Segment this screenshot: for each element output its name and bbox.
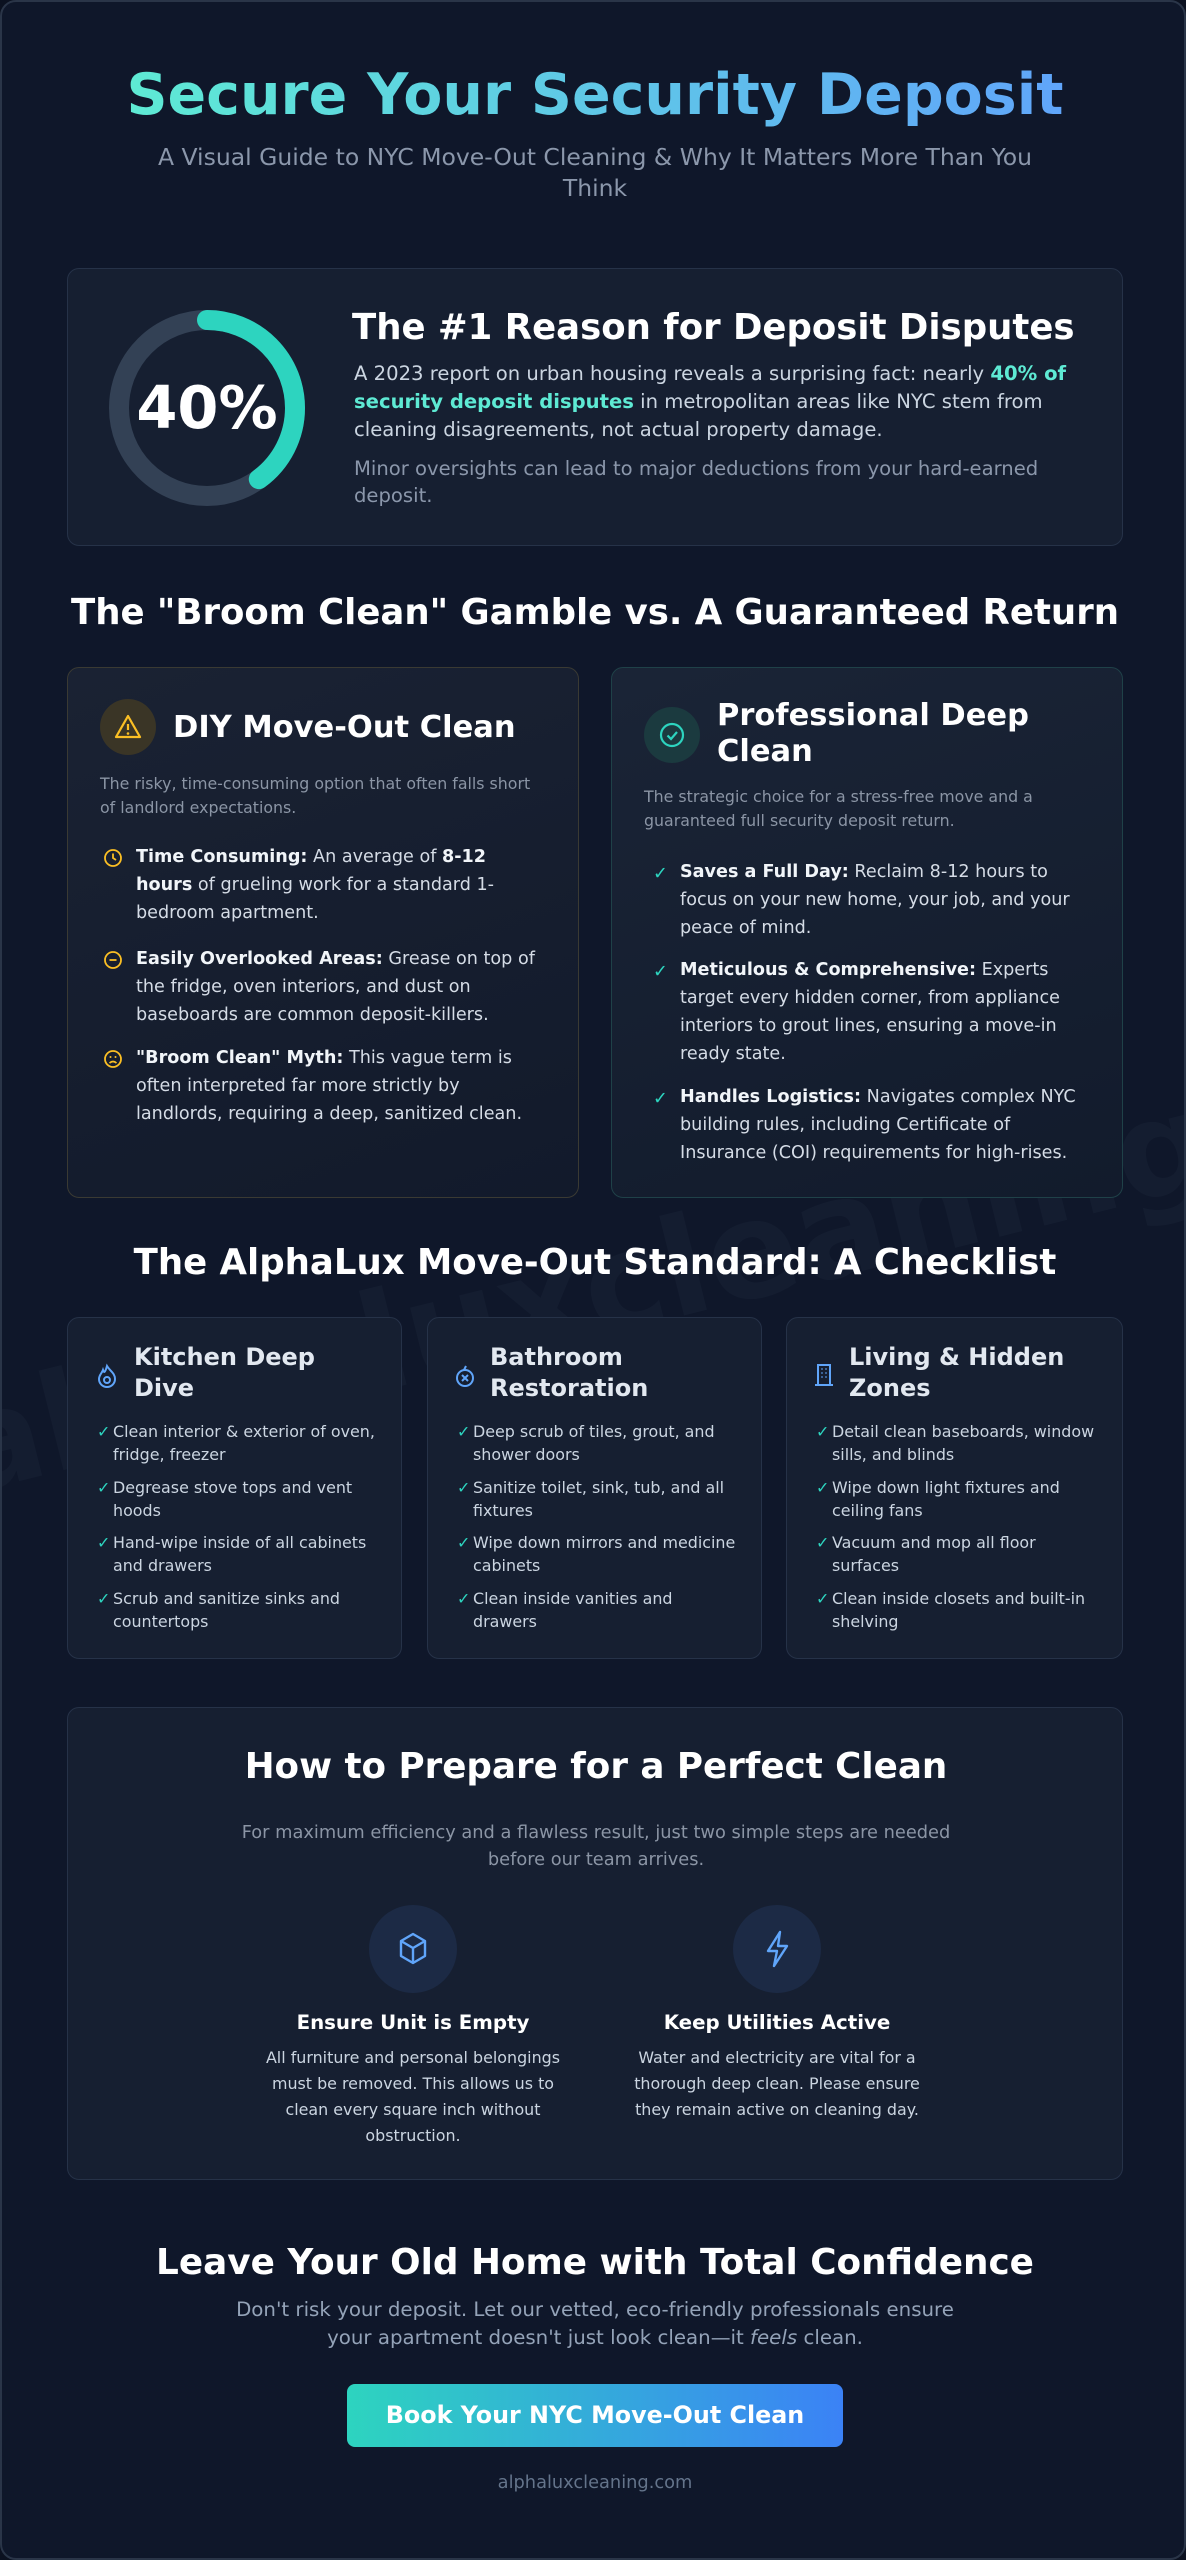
heading: comparison: The "Broom Clean" Gamble vs. A Guaranteed Return [71,592,1119,633]
icon: box [369,1905,457,1993]
text block: For maximum efficiency and a flawless result, just two simple steps are needed [242,1822,950,1843]
text block: cleaning disagreements, not actual property damage. [354,418,883,441]
text block: guaranteed full security deposit return. [644,811,955,830]
heading: Professional Deep [717,698,1029,733]
heading [849,1343,1064,1402]
heading [717,698,1029,769]
text block: The risky, time-consuming option that often falls short [100,774,530,793]
text block [354,362,1066,441]
panel: bathroom: ✓ [457,1533,470,1552]
item: myth [104,1048,522,1124]
panel: living: ✓ [816,1478,829,1497]
item: logistics: Handles Logistics: Navigates complex NYC [680,1087,1076,1107]
text block: before our team arrives. [488,1849,704,1870]
checklist: cabinets [473,1556,540,1575]
checklist: Vacuum and mop all floor [832,1533,1036,1552]
icon: building [815,1364,833,1386]
panel: kitchen: ✓ [97,1589,110,1608]
text block: deposit. [354,484,432,507]
checklist: sills, and blinds [832,1445,954,1464]
checklist: shower doors [473,1445,580,1464]
heading: Bathroom [490,1343,623,1371]
chart: 40% ring [109,310,305,506]
item: saves a day: Saves a Full Day: Reclaim 8-12 hours to [680,862,1048,882]
checklist: Wipe down light fixtures and [832,1478,1060,1497]
item: meticulous: interiors to grout lines, ensuring a move-in [680,1016,1057,1036]
panel: living [786,1317,1123,1659]
step: empty unit: must be removed. This allows us to [272,2074,554,2093]
checklist: drawers [473,1612,537,1631]
checklist: Deep scrub of tiles, grout, and [473,1422,715,1441]
text block [644,787,1033,830]
panel: DIY [67,667,579,1198]
step: empty unit: Ensure Unit is Empty [297,2011,529,2034]
item: time: hours of grueling work for a standard 1- [136,875,494,895]
heading [490,1343,648,1402]
subtitle: Think [563,174,627,202]
panel: Professional [611,667,1123,1198]
item: time: Time Consuming: An average of 8-12 [136,847,486,867]
item: myth: often interpreted far more strictly by [136,1076,460,1096]
step: utilities [634,1905,920,2119]
checklist: surfaces [832,1556,899,1575]
footer: alphaluxcleaning.com [498,2472,692,2493]
text block: closing: Don't risk your deposit. Let our vetted, eco-friendly professionals ensure [236,2298,954,2321]
icon: bathroom [456,1366,474,1387]
panel: kitchen: ✓ [97,1478,110,1497]
heading: Zones [849,1374,931,1402]
checklist: Scrub and sanitize sinks and [113,1589,340,1608]
step: utilities: Water and electricity are vital for a [638,2048,916,2067]
subtitle: A Visual Guide to NYC Move-Out Cleaning & Why It Matters More Than You [158,143,1032,171]
item: meticulous: ready state. [680,1044,786,1064]
item: myth: "Broom Clean" Myth: This vague term is [136,1048,512,1068]
text block: The strategic choice for a stress-free move and a [644,787,1033,806]
checklist: hoods [113,1501,161,1520]
panel: Professional: ✓ [653,1089,668,1109]
item: logistics [653,1087,1076,1163]
item: time: bedroom apartment. [136,903,319,923]
panel: Professional: ✓ [653,864,668,884]
checklist: Hand-wipe inside of all cabinets [113,1533,366,1552]
icon: check circle [644,707,700,763]
item: overlooked [104,949,536,1025]
heading: The #1 Reason for Deposit Disputes [352,307,1075,348]
heading: checklist: The AlphaLux Move-Out Standard: A Checklist [134,1242,1056,1283]
title: Secure Your Security Deposit [126,62,1064,128]
checklist: Clean inside vanities and [473,1589,673,1608]
icon: lightning [733,1905,821,1993]
item: meticulous [653,960,1060,1064]
checklist: shelving [832,1612,899,1631]
item: overlooked: baseboards are common deposit-killers. [136,1005,489,1025]
panel: kitchen: ✓ [97,1422,110,1441]
heading: Clean [717,734,813,769]
text block [354,457,1038,507]
checklist: Detail clean baseboards, window [832,1422,1094,1441]
item: overlooked: the fridge, oven interiors, and dust on [136,977,471,997]
text block: of landlord expectations. [100,798,296,817]
item: logistics: building rules, including Certificate of [680,1115,1010,1135]
heading: How to Prepare for a Perfect Clean [245,1746,947,1787]
heading [134,1343,315,1402]
text block: closing: your apartment doesn't just look clean—it feels clean. [327,2326,863,2349]
checklist: Clean interior & exterior of oven, [113,1422,375,1441]
checklist [457,1422,735,1631]
heading: Dive [134,1374,194,1402]
item: saves a day: peace of mind. [680,918,811,938]
panel: prepare: obstruction. [365,2126,461,2145]
step: utilities: Keep Utilities Active [664,2011,890,2034]
subtitle [158,143,1032,202]
text block [242,1822,950,1870]
item: meticulous: Meticulous & Comprehensive: Experts [680,960,1048,980]
heading: Kitchen Deep [134,1343,315,1371]
checklist: Sanitize toilet, sink, tub, and all [473,1478,724,1497]
panel: bathroom [427,1317,762,1659]
checklist: ceiling fans [832,1501,923,1520]
heading: Living & Hidden [849,1343,1064,1371]
panel: living: ✓ [816,1422,829,1441]
button: book: Book Your NYC Move-Out Clean [386,2401,804,2429]
checklist [816,1422,1094,1631]
button: book [347,2384,843,2447]
panel: stat [67,268,1123,546]
icon: flame [98,1364,116,1388]
panel: Professional: ✓ [653,962,668,982]
text block: security deposit disputes in metropolitan areas like NYC stem from [354,390,1043,413]
text block: A 2023 report on urban housing reveals a surprising fact: nearly 40% of [354,362,1066,385]
panel: prepare [67,1707,1123,2180]
panel: bathroom: ✓ [457,1478,470,1497]
heading: DIY Move-Out Clean [173,710,516,745]
panel: bathroom: ✓ [457,1589,470,1608]
checklist: and drawers [113,1556,212,1575]
item: meticulous: target every hidden corner, from appliance [680,988,1060,1008]
checklist [97,1422,375,1631]
item: myth: landlords, requiring a deep, sanitized clean. [136,1104,522,1124]
checklist: Clean inside closets and built-in [832,1589,1085,1608]
step: empty unit: All furniture and personal belongings [266,2048,560,2067]
chart: 40% ring: 40% [136,373,278,442]
step: empty unit: clean every square inch without [285,2100,540,2119]
checklist: fridge, freezer [113,1445,226,1464]
heading: Restoration [490,1374,648,1402]
step: utilities: thorough deep clean. Please ensure [634,2074,920,2093]
checklist: fixtures [473,1501,533,1520]
panel: living: ✓ [816,1533,829,1552]
step: utilities: they remain active on cleaning day. [635,2100,919,2119]
icon: warning [100,699,156,755]
checklist: Degrease stove tops and vent [113,1478,352,1497]
item: saves a day: focus on your new home, your job, and your [680,890,1070,910]
item: logistics: Insurance (COI) requirements for high-rises. [680,1143,1067,1163]
step: empty unit [266,1905,560,2145]
text block: closing [236,2298,954,2349]
text block: Minor oversights can lead to major deductions from your hard-earned [354,457,1038,480]
heading: closing: Leave Your Old Home with Total Confidence [156,2242,1034,2283]
checklist: countertops [113,1612,208,1631]
panel: kitchen: ✓ [97,1533,110,1552]
item: saves a day [653,862,1070,938]
panel: bathroom: ✓ [457,1422,470,1441]
item: time [104,847,494,923]
panel: living: ✓ [816,1589,829,1608]
panel: kitchen [67,1317,402,1659]
text block [100,774,530,817]
item: overlooked: Easily Overlooked Areas: Grease on top of [136,949,535,969]
checklist: Wipe down mirrors and medicine [473,1533,735,1552]
